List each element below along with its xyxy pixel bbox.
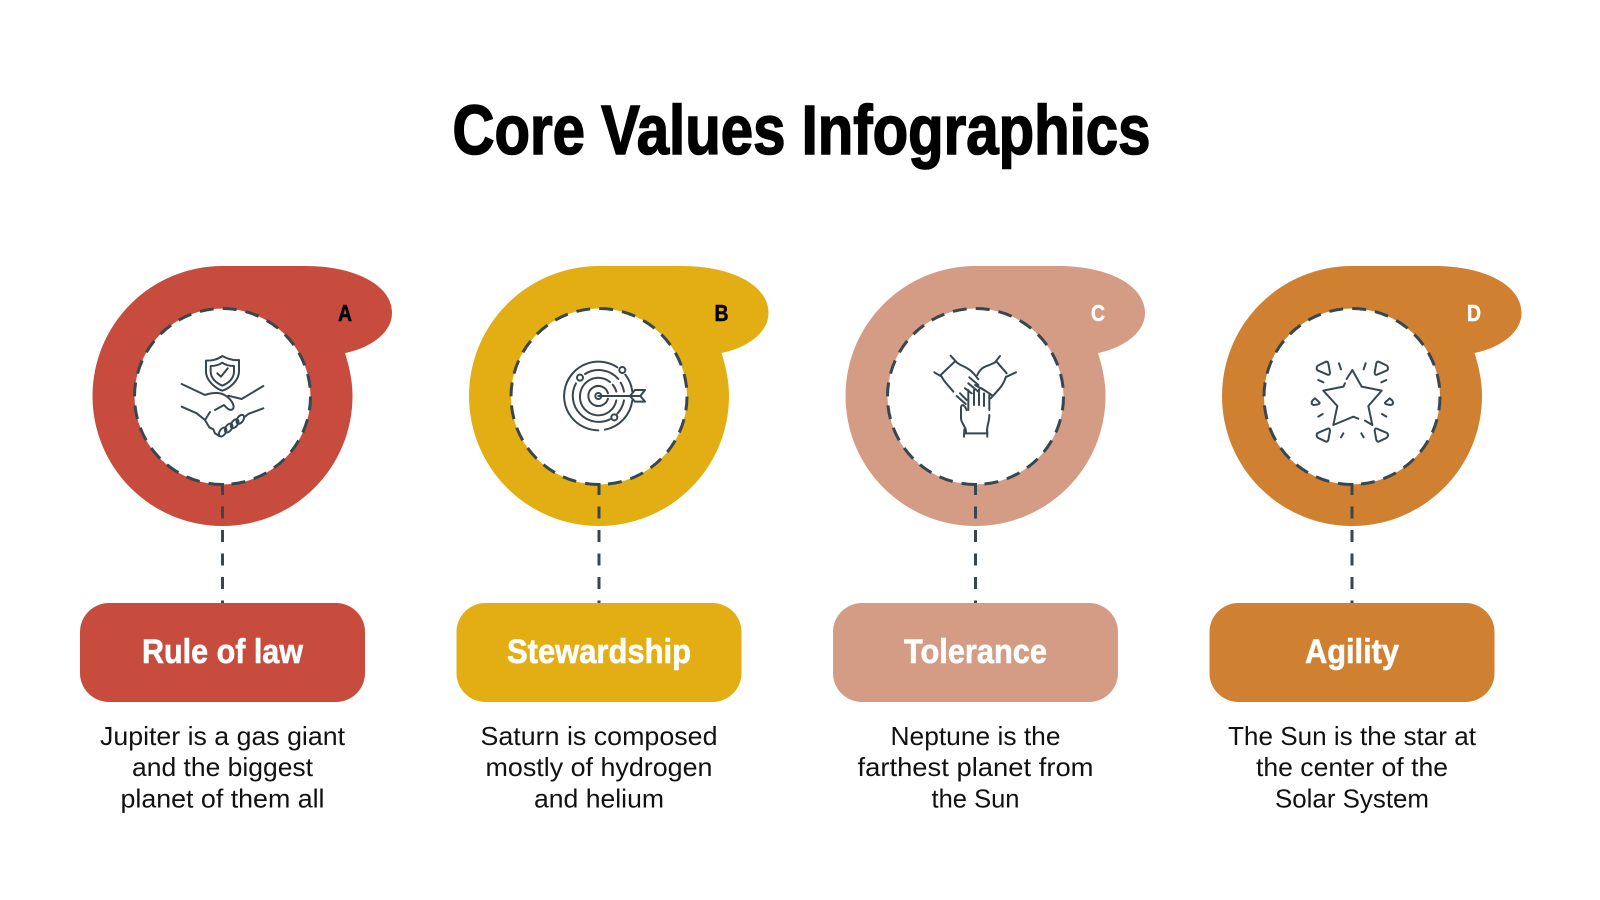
description: The Sun is the star at — [1228, 721, 1477, 751]
icon: three joined hands — [934, 356, 1016, 437]
panel: agility — [1210, 266, 1522, 814]
connector — [221, 483, 224, 604]
dashed circle — [134, 308, 310, 484]
letter B: B — [714, 300, 728, 326]
blob: pink — [846, 266, 1145, 526]
panel: rule of law — [80, 266, 392, 814]
letter D: D — [1467, 300, 1481, 326]
label pill — [80, 603, 365, 702]
letter C: C — [1091, 300, 1105, 326]
label pill — [456, 603, 742, 702]
blob: red — [93, 266, 392, 526]
description: Solar System — [1275, 784, 1429, 814]
blob: yellow — [469, 266, 768, 526]
label pill — [1210, 603, 1494, 702]
description: and helium — [534, 784, 664, 814]
dashed circle — [888, 308, 1064, 484]
panel: stewardship — [456, 266, 768, 814]
description: Jupiter is a gas giant — [100, 721, 346, 751]
letter A: A — [338, 300, 352, 326]
label text: Rule of law — [142, 633, 303, 671]
description: mostly of hydrogen — [486, 752, 712, 782]
icon: handshake and shield — [182, 356, 263, 438]
description: the center of the — [1256, 752, 1448, 782]
description: Saturn is composed — [480, 721, 718, 751]
dashed circle — [511, 308, 687, 484]
description: and the biggest — [132, 752, 314, 782]
description: Neptune is the — [890, 721, 1060, 751]
label pill — [833, 603, 1118, 702]
description: farthest planet from — [858, 752, 1094, 782]
blob: orange — [1222, 266, 1522, 526]
connector — [1350, 483, 1354, 604]
icon: target with arrow — [564, 362, 645, 430]
icon: star with sparkles — [1312, 362, 1393, 442]
description: planet of them all — [120, 784, 324, 814]
description: the Sun — [932, 784, 1020, 814]
connector — [974, 483, 977, 604]
connector — [598, 483, 600, 604]
title: Core Values Infographics — [452, 91, 1150, 169]
dashed circle — [1264, 308, 1440, 484]
label text: Agility — [1305, 633, 1399, 671]
label text: Stewardship — [507, 633, 691, 671]
panel: tolerance — [833, 266, 1145, 814]
label text: Tolerance — [904, 633, 1047, 671]
